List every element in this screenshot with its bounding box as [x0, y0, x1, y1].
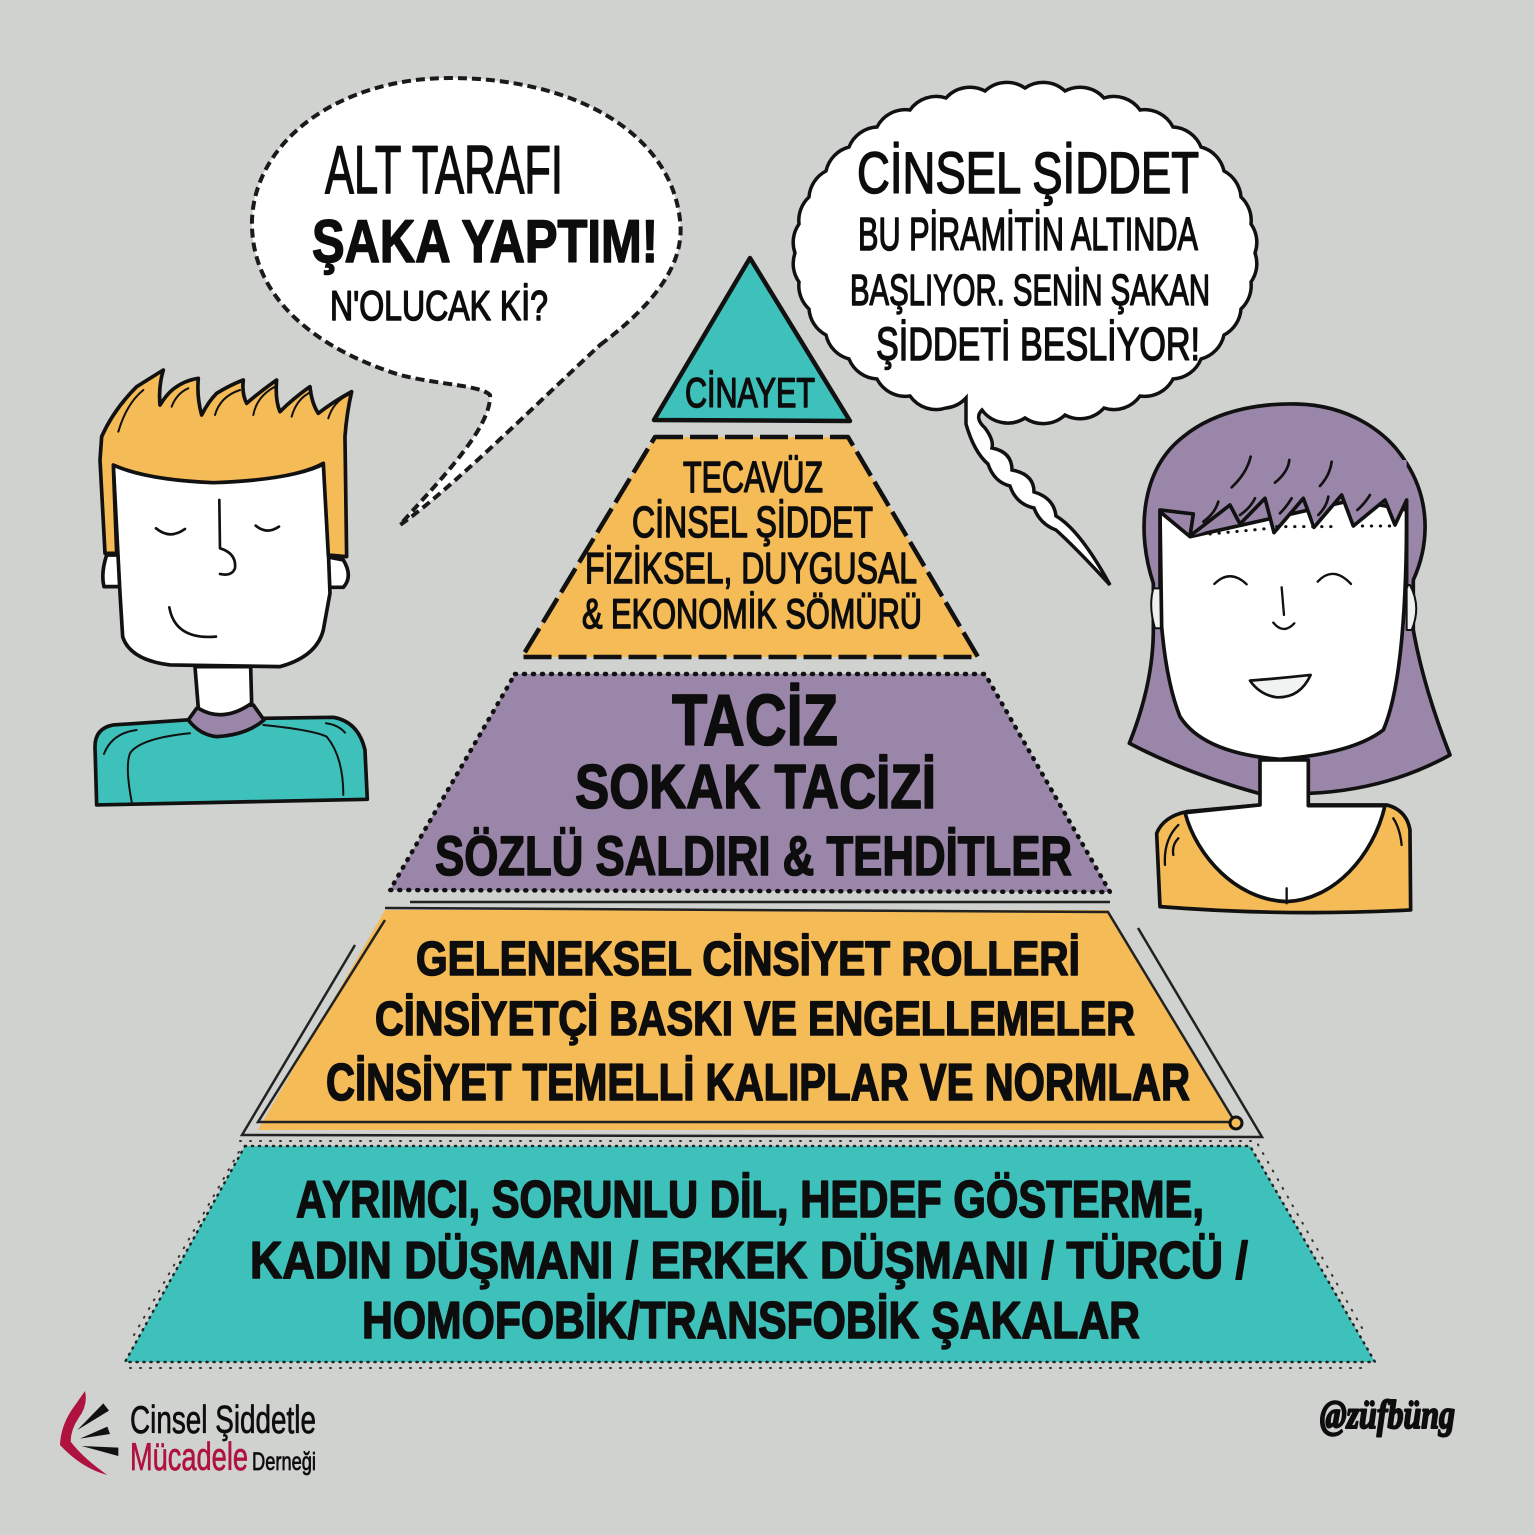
level 3 line 3: SÖZLÜ SALDIRI & TEHDİTLER — [435, 824, 1072, 887]
level 3 line 1: TACİZ — [672, 681, 838, 761]
bubble text: şiddeti besliyor: ŞİDDETİ BESLİYOR! — [876, 318, 1200, 370]
man hair — [100, 370, 352, 557]
level 3 line 2: SOKAK TACİZİ — [575, 753, 936, 822]
woman fringe outline — [1160, 495, 1407, 587]
level 5 line 1: AYRIMCI, SORUNLU DİL, HEDEF GÖSTERME, — [296, 1171, 1204, 1229]
bubble text: n'olucak ki: N'OLUCAK Kİ? — [330, 282, 548, 329]
woman facial features — [1214, 574, 1351, 629]
pyramid level 2: tecavüz — [522, 437, 978, 657]
level 2 line 1: TECAVÜZ — [683, 453, 823, 502]
left speech bubble — [252, 78, 681, 525]
woman hair strands — [1203, 457, 1370, 522]
pyramid level 3: taciz — [390, 674, 1110, 892]
man shirt — [95, 717, 367, 805]
woman clothing folds — [1165, 818, 1402, 903]
bubble text: cinsel şiddet: CİNSEL ŞİDDET — [857, 141, 1199, 206]
woman ears — [1151, 585, 1416, 630]
level 5 line 3: HOMOFOBİK/TRANSFOBİK ŞAKALAR — [362, 1292, 1140, 1350]
logo icon — [60, 1391, 118, 1475]
logo line 1: Cinsel Şiddetle — [130, 1399, 316, 1442]
woman hair — [1129, 404, 1450, 793]
level 4 line 3: CİNSİYET TEMELLİ KALIPLAR VE NORMLAR — [326, 1054, 1190, 1112]
bubble text: şaka yaptım: ŞAKA YAPTIM! — [312, 208, 658, 275]
woman face — [1160, 500, 1407, 759]
level 4 line 2: CİNSİYETÇİ BASKI VE ENGELLEMELER — [375, 993, 1135, 1046]
woman chest — [1185, 760, 1385, 902]
pyramid level 4: cinsiyet rolleri — [242, 902, 1262, 1137]
pyramid level 5: şakalar — [125, 1141, 1375, 1368]
level 2 line 4: & EKONOMİK SÖMÜRÜ — [582, 590, 922, 637]
pyramid level 1: cinayet — [654, 258, 850, 421]
woman top — [1157, 805, 1411, 913]
logo: cinsel şiddetle mücadele derneği — [60, 1391, 316, 1479]
woman character — [1129, 404, 1450, 913]
level 4 offset outline — [242, 902, 1262, 1137]
woman fringe speckles — [1210, 526, 1397, 534]
level 5 line 2: KADIN DÜŞMANI / ERKEK DÜŞMANI / TÜRCÜ / — [250, 1232, 1248, 1290]
level 4 line 1: GELENEKSEL CİNSİYET ROLLERİ — [416, 933, 1080, 986]
man neck — [195, 667, 252, 715]
logo line 2: Mücadele — [130, 1436, 248, 1479]
woman mouth — [1250, 675, 1311, 697]
level 5 speckled edge — [130, 1141, 1370, 1368]
right speech bubble — [793, 82, 1257, 585]
level 4 corner mark — [1230, 1117, 1242, 1129]
logo line 3: Derneği — [252, 1448, 316, 1476]
bubble text: alt tarafı: ALT TARAFI — [325, 132, 563, 208]
level 2 line 3: FİZİKSEL, DUYGUSAL — [585, 544, 917, 593]
bubble text: başlıyor senin şakan: BAŞLIYOR. SENİN ŞAKAN — [850, 266, 1210, 315]
man collar — [188, 705, 264, 737]
artist signature: @züfbüng — [1320, 1392, 1455, 1437]
level 1 label: CİNAYET — [685, 369, 815, 416]
man facial features — [156, 500, 279, 637]
man character — [95, 370, 367, 805]
woman fringe — [1160, 460, 1407, 536]
man ears — [103, 555, 348, 587]
bubble text: bu piramitin altında: BU PİRAMİTİN ALTINDA — [858, 208, 1198, 260]
man face — [113, 463, 330, 667]
level 2 line 2: CİNSEL ŞİDDET — [632, 498, 873, 547]
man shirt folds — [104, 387, 348, 802]
